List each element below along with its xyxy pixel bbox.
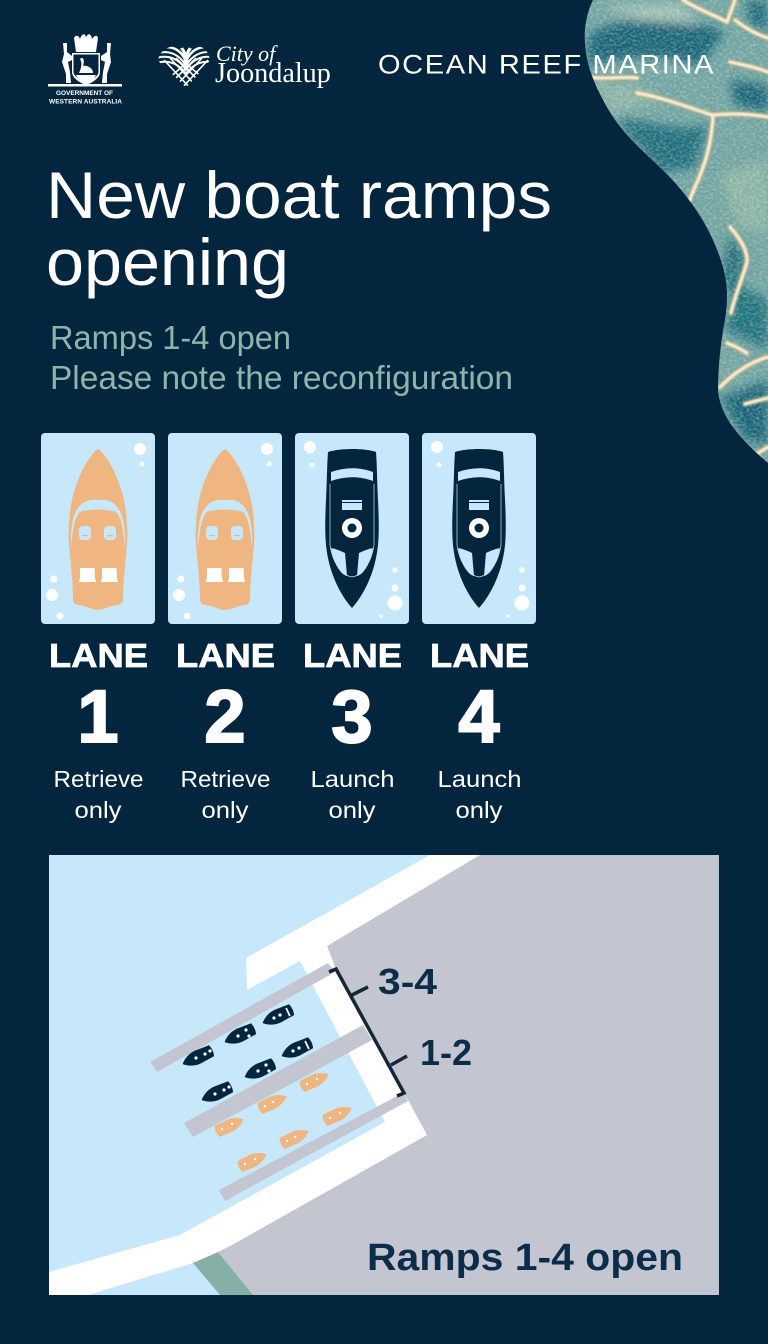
orange boat markings [221, 1078, 341, 1165]
navy boat markings [194, 1008, 310, 1096]
lane 1 panel [41, 433, 155, 624]
title: New boat ramps [46, 158, 552, 232]
logo: Ocean Reef Marina: OCEAN REEF MARINA [378, 50, 715, 80]
lane labels: Retrieve [180, 766, 270, 792]
logo caption: WESTERN AUSTRALIA [49, 98, 122, 106]
lane labels: Retrieve [54, 766, 144, 792]
lane labels: Launch [438, 766, 522, 792]
logo wordmark: Joondalup [215, 58, 331, 89]
water photo shape [570, 0, 768, 470]
title: opening [46, 225, 289, 299]
logo wordmark: City of [216, 41, 278, 66]
lane labels: only [74, 797, 122, 823]
lane 2 panel [168, 433, 282, 624]
lane labels: 3 [331, 675, 373, 758]
lane labels: only [328, 797, 376, 823]
logo: City of Joondalup [158, 45, 330, 88]
lane labels: LANE [303, 637, 402, 674]
grey jetties [150, 963, 408, 1201]
bracket [329, 969, 407, 1096]
lane labels: Launch [310, 766, 394, 792]
ramp diagram [49, 855, 719, 1295]
land [218, 855, 719, 1295]
subtitle: Ramps 1-4 open [50, 319, 291, 356]
boat: retrieve orange [69, 449, 127, 610]
lane labels: 2 [204, 675, 246, 758]
green path [193, 1252, 253, 1295]
lane labels: only [456, 797, 503, 823]
subtitle [50, 319, 513, 396]
white breakwater and ramp apron [49, 855, 482, 1295]
lane labels: only [202, 797, 249, 823]
lane labels: LANE [176, 637, 275, 674]
bubbles [431, 441, 530, 618]
lane labels: 1 [77, 675, 119, 758]
logo: Government of Western Australia [48, 34, 122, 105]
orange boats [213, 1068, 354, 1173]
lane labels [49, 637, 529, 823]
bubbles [173, 443, 273, 620]
lane labels: 4 [458, 675, 500, 758]
lane labels: LANE [49, 637, 148, 674]
boat: launch navy [452, 449, 506, 608]
subtitle: Please note the reconfiguration [50, 359, 513, 396]
lane labels: LANE [430, 637, 529, 674]
boat: launch navy [325, 449, 379, 608]
label 1-2: 1-2 [420, 1032, 472, 1073]
bubbles [304, 441, 402, 618]
boat: retrieve orange [196, 449, 254, 610]
bubbles [46, 443, 146, 620]
navy boats [180, 1003, 314, 1107]
caption: Ramps 1-4 open [367, 1237, 683, 1279]
label 3-4: 3-4 [378, 961, 437, 1002]
title [46, 158, 552, 299]
lane 3 panel [295, 433, 409, 624]
lane 4 panel [422, 433, 536, 624]
logo caption: GOVERNMENT OF [56, 90, 113, 97]
